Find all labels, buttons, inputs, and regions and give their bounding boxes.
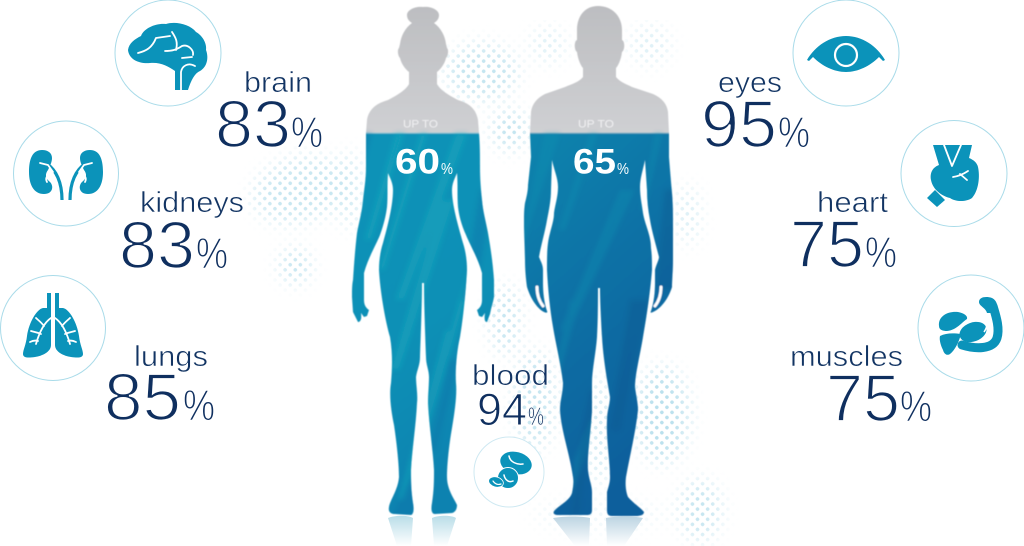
- male: foot reflection: [553, 516, 643, 546]
- lungs label: lungs: [134, 341, 208, 373]
- brain label: %: [291, 108, 323, 157]
- kidneys label: [119, 187, 244, 283]
- muscles label: [790, 341, 932, 436]
- heart label: [790, 187, 897, 282]
- heart label: 75: [790, 207, 864, 282]
- muscles label: %: [900, 382, 932, 431]
- eyes label: eyes: [718, 67, 782, 99]
- male: 65 percent: %: [617, 161, 629, 178]
- brain label: [215, 67, 323, 162]
- female: foot reflection: [388, 516, 456, 546]
- muscles label: 75: [826, 361, 900, 436]
- blood label: [472, 360, 549, 435]
- eyes label: 95: [701, 87, 777, 162]
- kidneys label: kidneys: [140, 187, 244, 219]
- male: up to label: UP TO: [578, 118, 614, 130]
- male figure: [523, 6, 674, 517]
- blood label: %: [528, 403, 544, 431]
- blood label: 94: [477, 384, 527, 435]
- kidneys label: %: [196, 229, 228, 278]
- female: 60 percent: 60: [395, 142, 440, 182]
- icon: eye: [793, 0, 899, 106]
- heart label: %: [865, 228, 897, 277]
- kidneys label: 83: [119, 208, 195, 283]
- lungs label: [104, 341, 215, 435]
- female: 60 percent: %: [441, 161, 453, 178]
- icon: brain: [115, 0, 221, 106]
- icon: kidneys: [14, 121, 118, 226]
- lungs label: 85: [104, 360, 181, 435]
- muscles label: muscles: [790, 341, 903, 373]
- icon: lungs: [0, 276, 106, 380]
- lungs label: %: [183, 381, 215, 430]
- male: 65 percent: 65: [573, 142, 616, 182]
- icon: heart: [901, 120, 1007, 226]
- eyes label: [701, 67, 810, 162]
- female: 60 percent: [395, 142, 453, 182]
- eyes label: %: [778, 108, 810, 157]
- male: 65 percent: [573, 142, 629, 182]
- brain label: brain: [244, 67, 312, 99]
- female: up to label: UP TO: [403, 118, 438, 130]
- icon: blood cells: [474, 437, 544, 507]
- halftone background: [230, 20, 740, 546]
- brain label: 83: [215, 87, 291, 162]
- blood label: blood: [472, 360, 549, 392]
- icon: muscles: [918, 275, 1024, 381]
- female figure: [351, 6, 495, 516]
- heart label: heart: [817, 187, 888, 219]
